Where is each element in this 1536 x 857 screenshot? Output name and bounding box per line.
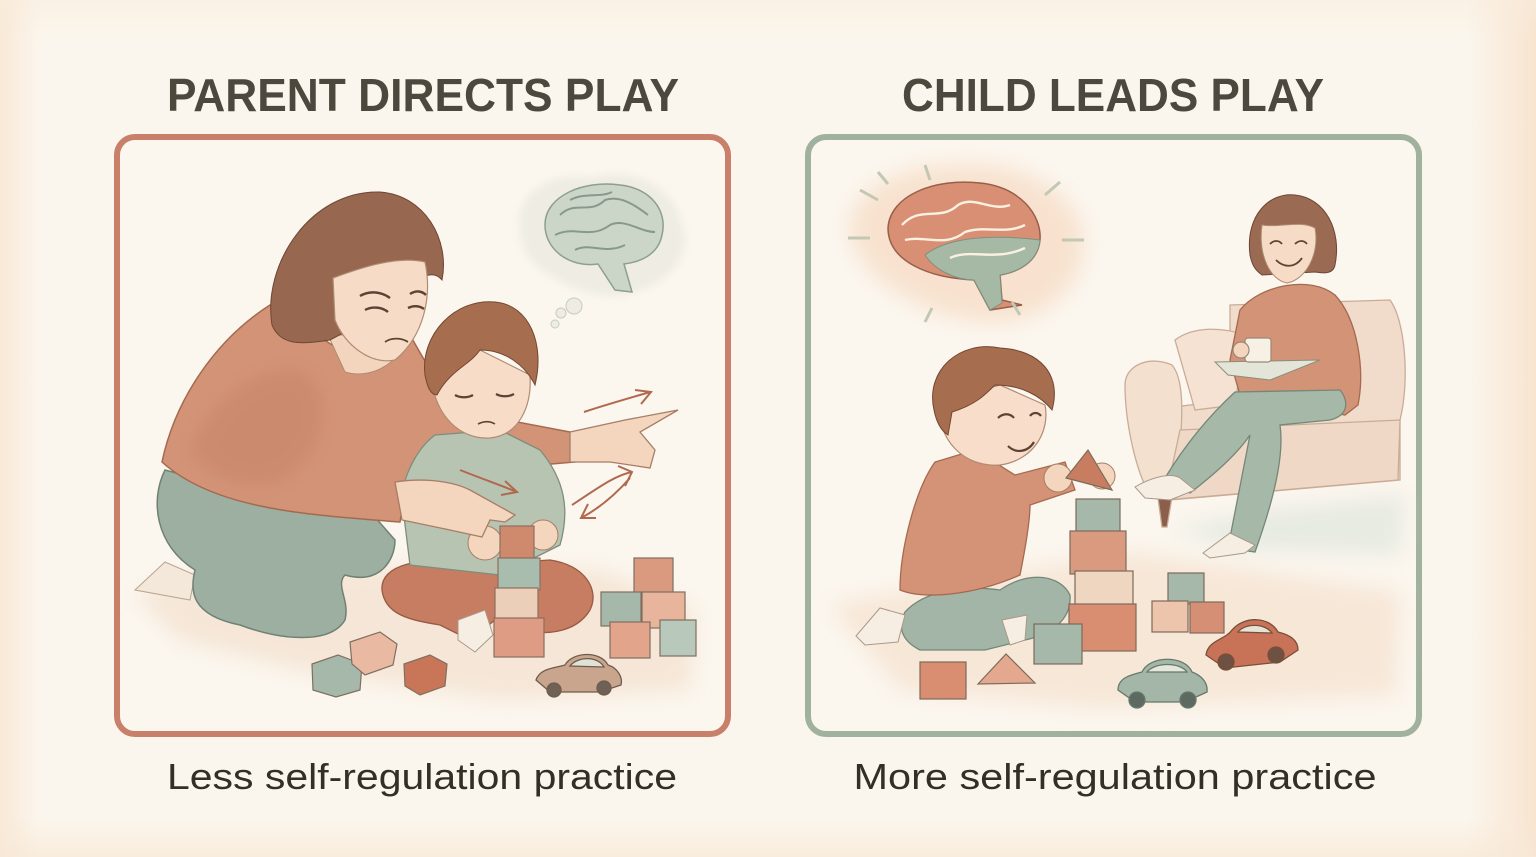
child head [939,385,1046,465]
mother neck [328,335,402,374]
playing child [856,347,1115,650]
child sweater [402,430,565,575]
book on lap [1215,360,1320,380]
heading: parent directs play: PARENT DIRECTS PLAY [167,69,679,121]
mother foot [135,562,195,600]
mother facial features [360,291,426,342]
seated mother trousers [1165,390,1346,552]
child hands [468,526,502,560]
mother guiding hand over child [395,480,515,537]
cup [1233,338,1271,362]
scattered blocks, left [312,558,696,697]
child figure, directed [382,302,593,652]
mother hair back [271,192,443,343]
child foot [458,610,493,652]
sweater shading [190,370,322,483]
child face features [455,394,514,424]
block tower, left [494,526,544,657]
mother figure [135,192,678,638]
panel: child leads play [808,137,1419,734]
mother sweater [162,305,575,522]
panel: parent directs play [117,137,728,734]
floor wash [135,565,695,700]
block tower, right [1066,450,1136,651]
seated mother hair [1249,195,1337,275]
child sweater [900,450,1075,595]
caption: more self-regulation practice: More self-regulation practice [854,756,1376,797]
sofa [1125,300,1405,527]
seated mother feet [1135,476,1195,500]
scattered blocks, right [920,573,1224,699]
seated mother face [1261,224,1316,283]
seated mother [1135,195,1361,558]
child hair [425,302,538,395]
floor wash [830,495,1405,708]
toy car, green [1118,659,1207,708]
mother pointing hand [570,410,678,468]
toy car, left [536,654,621,697]
mother trousers [157,470,395,638]
heading: child leads play: CHILD LEADS PLAY [902,69,1324,121]
child trousers [901,577,1070,650]
caption: less self-regulation practice: Less self-regulation practice [167,756,677,797]
child trousers [382,560,593,640]
child head [432,350,530,438]
icon: glowing brain [848,165,1084,322]
child socks [856,608,905,645]
mother face [333,260,427,361]
direction arrows [460,390,651,518]
icon: faded brain in thought cloud [520,174,685,328]
toy car, red [1206,620,1298,670]
child hands [1044,464,1072,492]
seated mother sweater [1230,284,1361,415]
